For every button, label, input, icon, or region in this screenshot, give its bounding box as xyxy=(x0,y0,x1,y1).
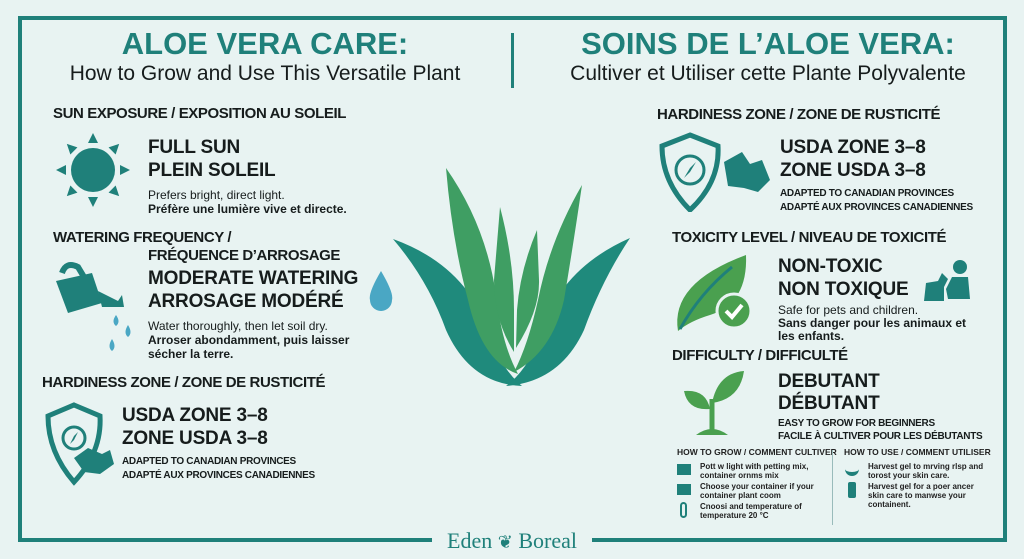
heading: SUN EXPOSURE / EXPOSITION AU SOLEIL xyxy=(53,105,346,122)
text: FACILE À CULTIVER POUR LES DÉBUTANTS xyxy=(778,431,982,442)
item: thermometer xyxy=(680,502,802,520)
panel: how to use: Harvest gel to mrving rlsp and xyxy=(868,462,983,471)
panel: how to use xyxy=(844,447,991,509)
text: ADAPTÉ AUX PROVINCES CANADIENNES xyxy=(122,470,315,481)
panel: hardiness right xyxy=(657,106,973,213)
item: hand gel xyxy=(845,462,983,480)
panel: watering xyxy=(53,229,392,361)
heading: HOW TO GROW / COMMENT CULTIVER xyxy=(677,447,837,457)
item: tube xyxy=(848,482,974,509)
text xyxy=(778,256,966,343)
panel: sun exposure xyxy=(53,105,347,216)
text: ZONE USDA 3–8 xyxy=(780,160,926,181)
text xyxy=(148,137,347,216)
icon: shield with map xyxy=(660,132,770,212)
text: les enfants. xyxy=(778,329,844,343)
item: container xyxy=(677,482,814,500)
title left: How to Grow and Use This Versatile Plant xyxy=(70,62,460,85)
panel: difficulty xyxy=(672,346,982,442)
text: Prefers bright, direct light. xyxy=(148,188,285,202)
footer logo: Eden ❦ Boreal xyxy=(447,528,577,553)
icon: leaf with check xyxy=(677,255,750,331)
text: DEBUTANT xyxy=(778,371,879,392)
icon: pet and child xyxy=(924,260,970,301)
title right: Cultiver et Utiliser cette Plante Polyvalente xyxy=(570,62,966,85)
divider bottom xyxy=(832,450,833,525)
heading: WATERING FREQUENCY / xyxy=(53,229,231,246)
title divider xyxy=(511,33,514,88)
text: sécher la terre. xyxy=(148,347,233,361)
text xyxy=(148,268,358,361)
title left: ALOE VERA CARE: xyxy=(122,26,408,61)
footer logo xyxy=(432,526,592,556)
heading: FRÉQUENCE D’ARROSAGE xyxy=(148,247,340,264)
title right xyxy=(570,26,966,85)
title right: SOINS DE L’ALOE VERA: xyxy=(581,26,955,61)
panel: how to grow: Choose your container if your xyxy=(700,482,814,491)
icon: sun xyxy=(56,133,130,207)
panel: toxicity xyxy=(672,228,970,343)
panel: how to grow: Pott w light with petting mix, xyxy=(700,462,808,471)
text: ZONE USDA 3–8 xyxy=(122,428,268,449)
icon: water drop xyxy=(370,271,392,311)
text: FULL SUN xyxy=(148,137,240,158)
text: Safe for pets and children. xyxy=(778,303,918,317)
text: Sans danger pour les animaux et xyxy=(778,316,966,330)
heading: HARDINESS ZONE / ZONE DE RUSTICITÉ xyxy=(42,374,325,391)
text: Arroser abondamment, puis laisser xyxy=(148,333,349,347)
heading: TOXICITY LEVEL / NIVEAU DE TOXICITÉ xyxy=(672,229,946,246)
panel: how to use: torost your skin care. xyxy=(868,471,949,480)
text: NON-TOXIC xyxy=(778,256,882,277)
illustration: aloe vera plant xyxy=(393,168,630,386)
item: pot xyxy=(677,462,808,480)
panel: how to grow: container plant coom xyxy=(700,491,781,500)
text: USDA ZONE 3–8 xyxy=(780,137,926,158)
text: DÉBUTANT xyxy=(778,393,879,414)
text: NON TOXIQUE xyxy=(778,279,908,300)
text: EASY TO GROW FOR BEGINNERS xyxy=(778,418,935,429)
heading: HARDINESS ZONE / ZONE DE RUSTICITÉ xyxy=(657,106,940,123)
panel: how to grow: Cnoosi and temperature of xyxy=(700,502,802,511)
text xyxy=(780,137,973,213)
heading xyxy=(53,229,340,264)
text: ADAPTED TO CANADIAN PROVINCES xyxy=(780,188,954,199)
panel: how to grow: temperature 20 °C xyxy=(700,511,769,520)
panel: how to grow xyxy=(677,447,837,520)
text: Préfère une lumière vive et directe. xyxy=(148,202,347,216)
text: Water thoroughly, then let soil dry. xyxy=(148,319,328,333)
text: MODERATE WATERING xyxy=(148,268,358,289)
panel: how to grow: container ornms mix xyxy=(700,471,779,480)
panel: how to use: containent. xyxy=(868,500,911,509)
title left xyxy=(70,26,460,85)
heading: DIFFICULTY / DIFFICULTÉ xyxy=(672,347,848,364)
text: PLEIN SOLEIL xyxy=(148,160,275,181)
icon: shield xyxy=(46,402,114,486)
text: ADAPTED TO CANADIAN PROVINCES xyxy=(122,456,296,467)
panel: how to use: skin care to manwse your xyxy=(868,491,966,500)
text xyxy=(778,371,982,442)
text xyxy=(122,405,315,481)
panel: how to use: Harvest gel for a poer ancer xyxy=(868,482,974,491)
panel: hardiness left xyxy=(42,374,325,486)
icon: sprout xyxy=(684,371,744,435)
text: ADAPTÉ AUX PROVINCES CANADIENNES xyxy=(780,202,973,213)
text: USDA ZONE 3–8 xyxy=(122,405,268,426)
heading: HOW TO USE / COMMENT UTILISER xyxy=(844,447,991,457)
icon: watering can xyxy=(56,262,130,351)
text: ARROSAGE MODÉRÉ xyxy=(148,291,343,312)
